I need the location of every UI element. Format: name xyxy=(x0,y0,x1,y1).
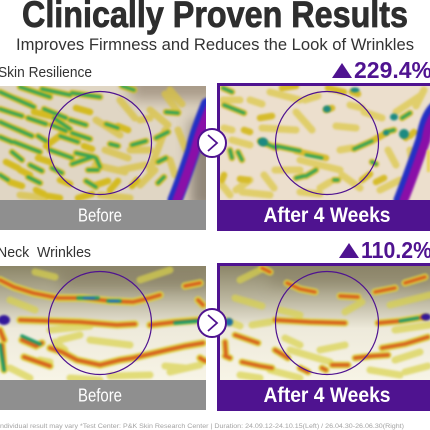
panel: skin resilience before xyxy=(0,86,206,230)
footnote: Individual result may vary *Test Center: P&K Skin Research Center | Duration: 24.09.12-24.10.15(Left) / 26.04.30-26.06.30(Right) xyxy=(0,423,404,430)
stat: skin resilience increase: 229.4% xyxy=(354,57,430,83)
label bar: before: Before xyxy=(78,206,122,226)
heading: skin resilience: Skin Resilience xyxy=(0,64,92,81)
panel: skin resilience after xyxy=(217,84,430,231)
frame and label bar: after xyxy=(217,84,430,231)
photo: before skin scan xyxy=(0,86,206,200)
measurement circle xyxy=(48,92,152,194)
panel: neck wrinkles after xyxy=(217,262,430,411)
panel: neck wrinkles before xyxy=(0,262,210,410)
frame and label bar: after: After 4 Weeks xyxy=(264,204,390,227)
arrow: neck wrinkles comparison xyxy=(198,309,226,337)
measurement circle xyxy=(48,272,152,374)
label bar: before xyxy=(0,200,206,230)
arrow: skin resilience comparison xyxy=(198,129,226,157)
label bar: before: Before xyxy=(78,386,122,406)
subtitle: Improves Firmness and Reduces the Look of Wrinkles xyxy=(16,36,414,54)
measurement circle xyxy=(276,92,378,194)
label bar: before xyxy=(0,380,206,410)
photo: before neck scan xyxy=(0,262,210,380)
photo: after skin scan xyxy=(220,86,430,200)
frame and label bar: after: After 4 Weeks xyxy=(264,384,390,407)
photo: after neck scan xyxy=(220,262,430,380)
frame and label bar: after xyxy=(217,264,430,411)
measurement circle xyxy=(276,272,378,374)
